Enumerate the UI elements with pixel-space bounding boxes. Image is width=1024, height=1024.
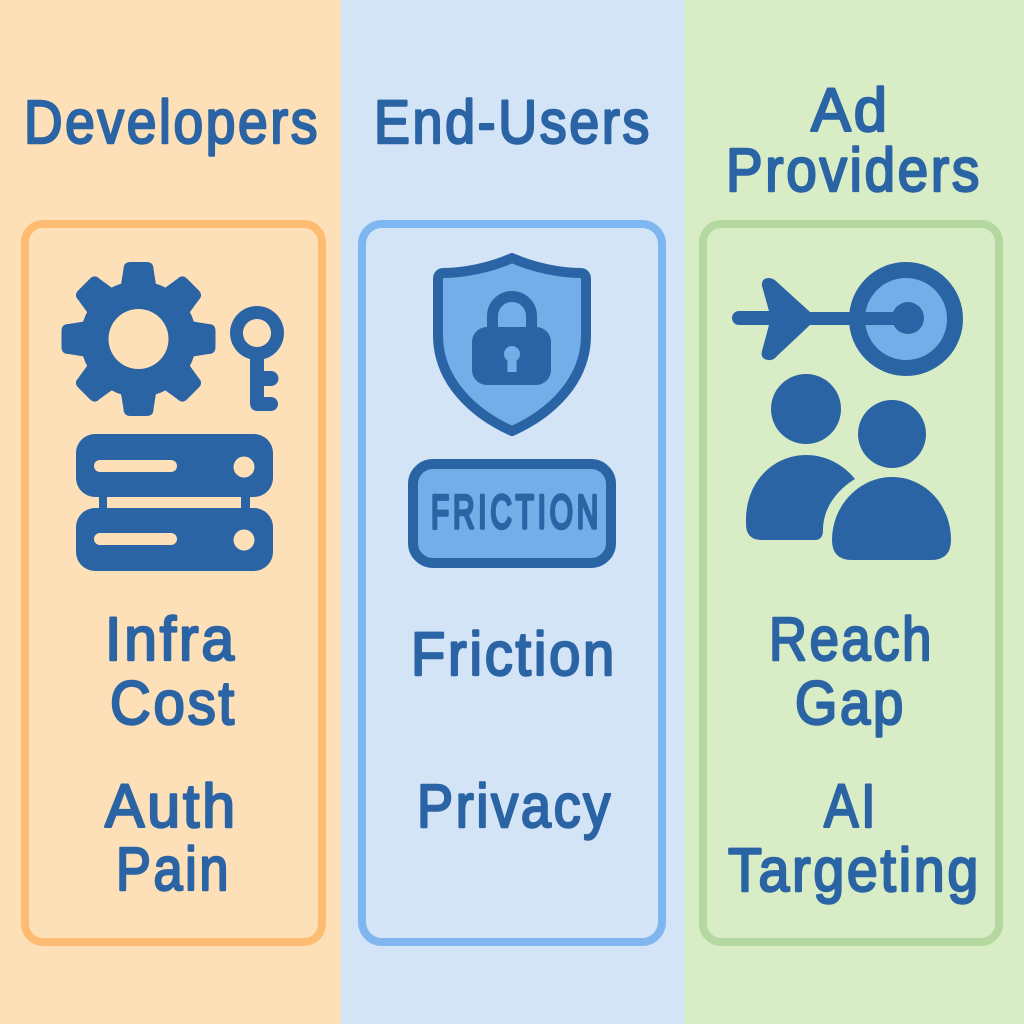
label: AI Targeting: Targeting [728, 836, 981, 904]
heading: Ad Providers: Ad [811, 76, 890, 144]
panel: Ad Providers card [703, 224, 999, 942]
label: Auth Pain [105, 772, 238, 903]
badge: FRICTION: FRICTION [431, 485, 602, 538]
heading: Developers: Developers [24, 88, 320, 156]
icon: gear [62, 262, 216, 416]
label: Infra Cost: Cost [110, 669, 237, 737]
label: Reach Gap: Reach [769, 605, 934, 673]
panel: End-Users card [362, 224, 662, 942]
icon: arrow hitting target [732, 270, 955, 368]
panel: Developers card [25, 224, 322, 942]
label: Reach Gap: Gap [795, 669, 906, 737]
column: Ad Providers [684, 0, 1024, 1024]
icon: key [230, 306, 284, 411]
column background: End-Users [341, 0, 684, 1024]
icon: server stack [76, 434, 273, 571]
column: End-Users [341, 0, 684, 1024]
label: Privacy: Privacy [417, 772, 613, 840]
heading: Ad Providers: Providers [726, 136, 982, 204]
label: Auth Pain: Pain [116, 835, 231, 903]
column background: Developers [0, 0, 341, 1024]
badge: FRICTION [413, 464, 611, 563]
heading: Ad Providers [726, 76, 982, 204]
label: Auth Pain: Auth [105, 772, 238, 840]
icon: two people [746, 374, 951, 560]
label: AI Targeting: AI [824, 772, 878, 840]
icon: shield with padlock [438, 258, 586, 431]
column: Developers [0, 0, 341, 1024]
label: Infra Cost: Infra [105, 605, 237, 673]
label: AI Targeting [728, 772, 981, 904]
heading: End-Users: End-Users [374, 88, 652, 156]
label: Reach Gap [769, 605, 934, 737]
label: Infra Cost [105, 605, 237, 737]
label: Friction: Friction [411, 620, 617, 688]
column background: Ad Providers [684, 0, 1024, 1024]
